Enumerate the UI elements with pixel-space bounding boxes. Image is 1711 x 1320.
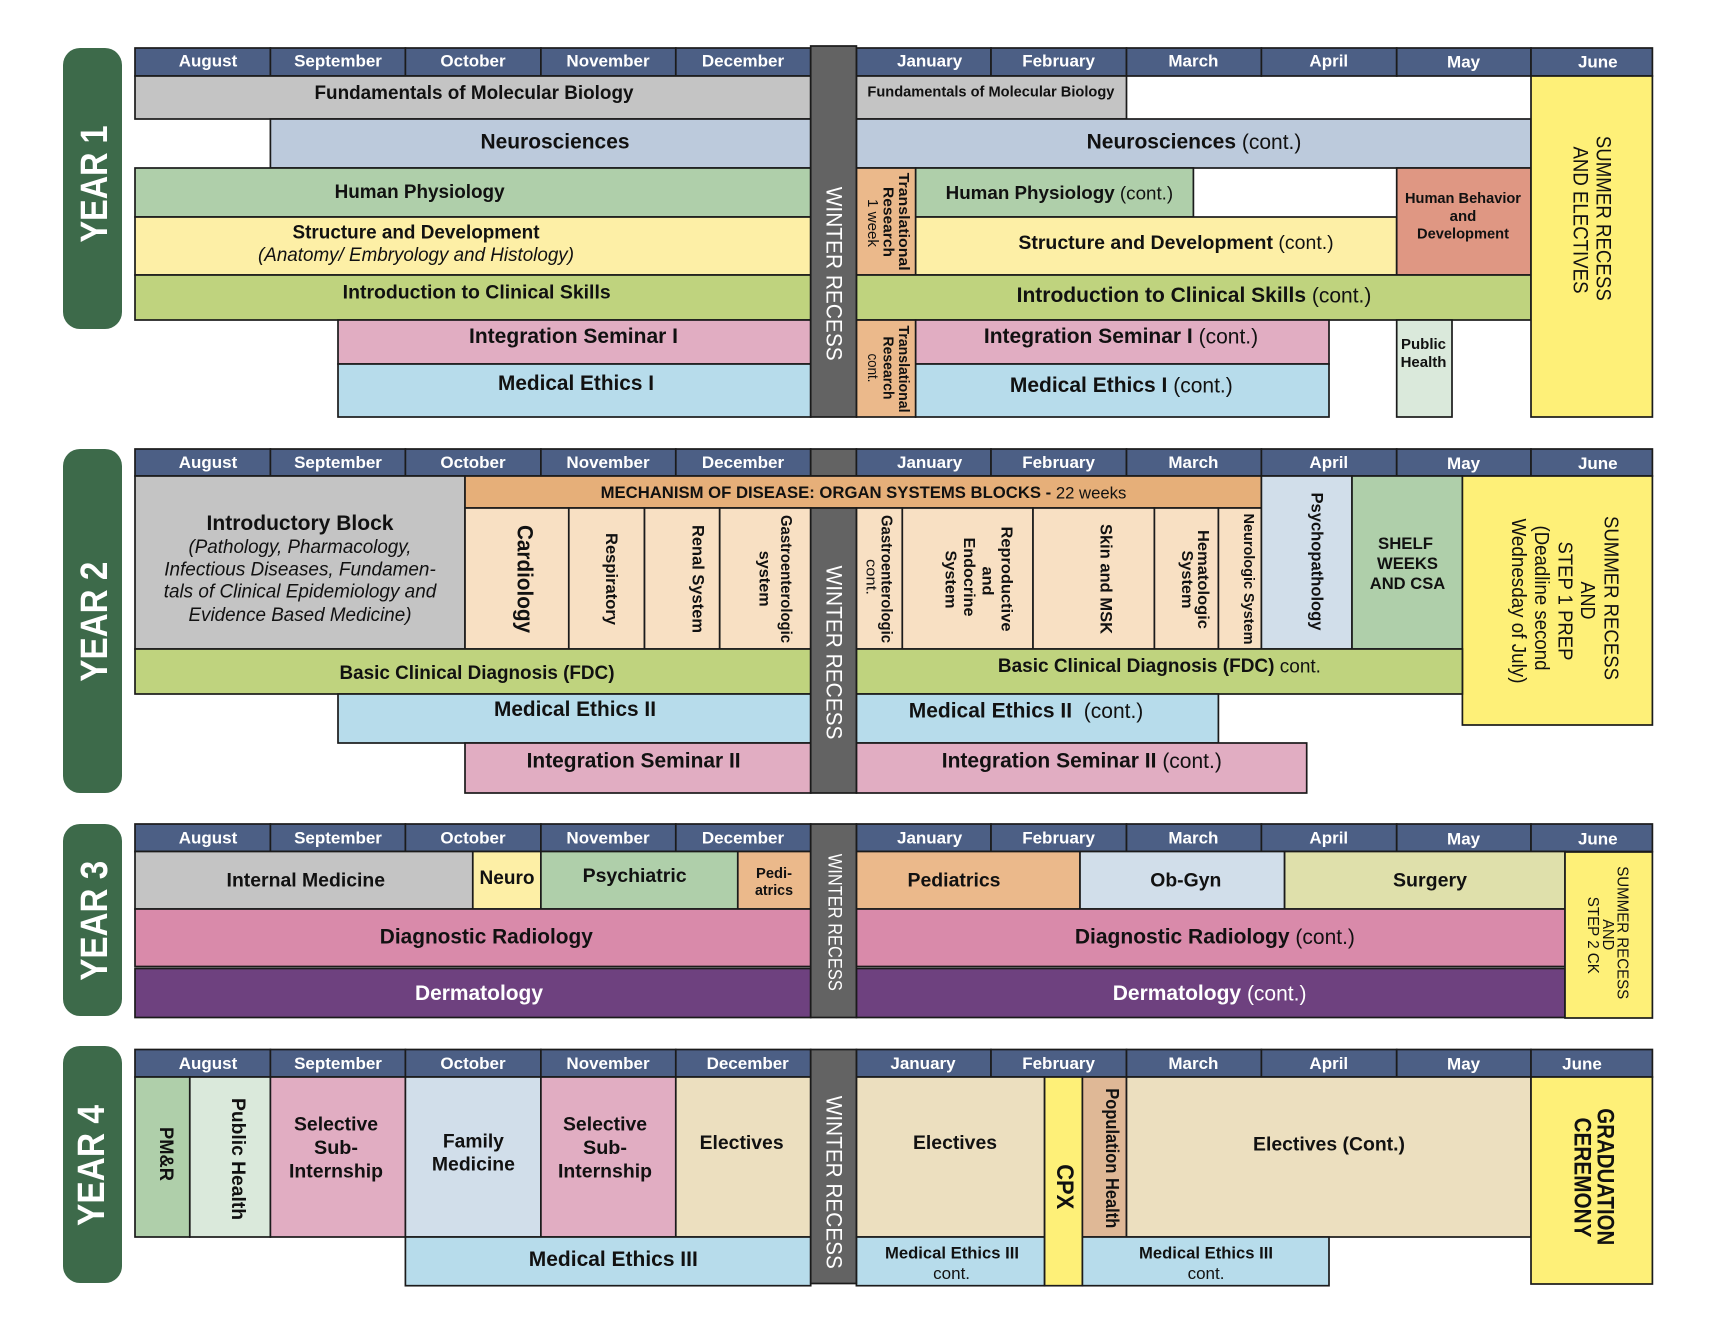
Renal System bbox=[644, 508, 720, 649]
Neurosciences bbox=[270, 119, 811, 168]
Introductory Block: Evidence Based Medicine) bbox=[188, 605, 412, 626]
Shelf weeks and CSA: WEEKS bbox=[1377, 554, 1438, 573]
Shelf weeks and CSA bbox=[1352, 476, 1462, 649]
winter recess bar: WINTER RECESS bbox=[821, 1096, 846, 1269]
year 4 label bbox=[63, 1046, 122, 1283]
month header row: April bbox=[1309, 1054, 1348, 1073]
month header row: December bbox=[702, 52, 784, 70]
month header row: January bbox=[897, 52, 963, 70]
month header row: October bbox=[440, 828, 506, 848]
Dermatology bbox=[135, 968, 811, 1018]
Reproductive and Endocrine System: Reproductive bbox=[998, 526, 1014, 632]
Psychiatric bbox=[541, 852, 738, 909]
Electives January: Electives bbox=[913, 1132, 997, 1154]
Mechanism of Disease banner: MECHANISM OF DISEASE: ORGAN SYSTEMS BLOCKS - 22 weeks bbox=[601, 483, 1126, 502]
winter recess bar: WINTER RECESS bbox=[821, 566, 846, 740]
Introduction to Clinical Skills continued bbox=[856, 275, 1531, 320]
Selective Sub-Internship bbox=[541, 1077, 676, 1237]
winter recess bar: WINTER RECESS bbox=[821, 187, 846, 361]
Introduction to Clinical Skills continued: Introduction to Clinical Skills (cont.) bbox=[1017, 284, 1371, 307]
Neuro bbox=[473, 852, 541, 909]
month header row: April bbox=[1309, 453, 1348, 472]
Neurosciences continued bbox=[856, 119, 1531, 168]
Gastroenterologic continued: cont. bbox=[862, 559, 879, 595]
year 1 label bbox=[63, 48, 122, 329]
month header row: December bbox=[702, 828, 784, 848]
Introductory Block bbox=[135, 476, 465, 649]
Human Physiology continued: Human Physiology (cont.) bbox=[946, 182, 1173, 203]
Medical Ethics I continued bbox=[916, 364, 1329, 417]
Gastroenterologic continued bbox=[856, 508, 902, 649]
Pediatrics: Pediatrics bbox=[908, 869, 1001, 891]
Cardiology: Cardiology bbox=[512, 525, 538, 634]
Introduction to Clinical Skills bbox=[135, 275, 811, 320]
Diagnostic Radiology: Diagnostic Radiology bbox=[380, 926, 593, 948]
month header row: November bbox=[566, 1054, 650, 1073]
Psychopathology: Psychopathology bbox=[1308, 492, 1326, 631]
Selective Sub-Internship bbox=[270, 1077, 405, 1237]
Structure and Development: Structure and Development bbox=[292, 223, 540, 244]
Translational Research 1 week: Translational bbox=[895, 173, 912, 271]
Structure and Development continued bbox=[916, 217, 1397, 275]
month header row: November bbox=[566, 453, 650, 472]
Electives bbox=[676, 1077, 811, 1237]
Surgery: Surgery bbox=[1393, 869, 1467, 891]
Translational Research 1 week: 1 week bbox=[864, 199, 881, 248]
Summer recess and Step 1 prep: SUMMER RECESS bbox=[1600, 516, 1622, 680]
winter recess bar: WINTER RECESS bbox=[823, 854, 844, 991]
Medical Ethics III continued bbox=[1082, 1237, 1329, 1286]
Gastroenterologic system: Gastroenterologic bbox=[777, 515, 794, 643]
Introduction to Clinical Skills: Introduction to Clinical Skills bbox=[343, 282, 611, 303]
Medical Ethics III continued: Medical Ethics III bbox=[885, 1244, 1019, 1262]
Psychiatric: Psychiatric bbox=[583, 865, 687, 887]
Medical Ethics I continued: Medical Ethics I (cont.) bbox=[1010, 374, 1233, 397]
Integration Seminar I continued bbox=[916, 320, 1329, 364]
Surgery bbox=[1285, 852, 1565, 909]
Summer recess and electives: AND ELECTIVES bbox=[1568, 146, 1591, 294]
month header row: March bbox=[1168, 828, 1218, 848]
Summer recess and Step 1 prep: Wednesday of July) bbox=[1507, 518, 1529, 684]
Medical Ethics II bbox=[338, 694, 811, 743]
Neurologic System bbox=[1218, 508, 1261, 649]
Gastroenterologic system bbox=[720, 508, 811, 649]
Gastroenterologic system: system bbox=[756, 551, 772, 607]
year 1 label: YEAR 1 bbox=[74, 126, 116, 242]
month header row: February bbox=[1022, 1054, 1096, 1073]
Ob-Gyn: Ob-Gyn bbox=[1150, 869, 1221, 891]
PM&R: PM&R bbox=[155, 1127, 176, 1181]
Electives continued bbox=[1126, 1077, 1531, 1237]
Medical Ethics III continued bbox=[856, 1237, 1045, 1286]
Ob-Gyn bbox=[1080, 852, 1285, 909]
Introductory Block: Introductory Block bbox=[206, 511, 394, 535]
Basic Clinical Diagnosis continued bbox=[856, 649, 1462, 694]
Translational Research continued: Translational bbox=[895, 326, 912, 412]
Translational Research continued: cont. bbox=[864, 354, 881, 382]
Gastroenterologic continued: Gastroenterologic bbox=[878, 515, 894, 643]
Respiratory bbox=[569, 508, 644, 649]
Shelf weeks and CSA: SHELF bbox=[1378, 534, 1433, 553]
panel: year 4 bbox=[63, 1046, 1652, 1286]
year 3 label bbox=[63, 824, 122, 1016]
Graduation ceremony: GRADUATION bbox=[1591, 1108, 1618, 1245]
Pediatrics bbox=[856, 852, 1080, 909]
Fundamentals of Molecular Biology continued: Fundamentals of Molecular Biology bbox=[867, 83, 1115, 100]
Shelf weeks and CSA: AND CSA bbox=[1370, 574, 1445, 593]
month header row: May bbox=[1447, 830, 1481, 848]
month header row: February bbox=[1022, 52, 1096, 70]
Translational Research 1 week bbox=[856, 168, 916, 275]
month header row: December bbox=[702, 453, 784, 472]
Selective Sub-Internship: Selective bbox=[563, 1114, 647, 1136]
winter recess bar bbox=[811, 1050, 856, 1284]
Respiratory: Respiratory bbox=[602, 533, 621, 626]
Reproductive and Endocrine System: System bbox=[942, 550, 958, 608]
Reproductive and Endocrine System: Endocrine bbox=[960, 538, 977, 617]
month header row: January bbox=[897, 453, 963, 472]
Neurosciences: Neurosciences bbox=[480, 130, 630, 154]
Selective Sub-Internship: Internship bbox=[558, 1160, 652, 1182]
Integration Seminar II continued bbox=[856, 743, 1307, 793]
month header row: March bbox=[1168, 1054, 1218, 1073]
Selective Sub-Internship: Selective bbox=[294, 1114, 378, 1136]
Hematologic System: Hematologic bbox=[1194, 530, 1211, 629]
Neurosciences continued: Neurosciences (cont.) bbox=[1087, 130, 1301, 154]
month header row: September bbox=[294, 828, 382, 848]
month header row: January bbox=[890, 1054, 956, 1073]
Family Medicine: Medicine bbox=[432, 1154, 515, 1176]
Human Behavior and Development: Development bbox=[1417, 226, 1509, 242]
Summer recess and Step 2 CK: SUMMER RECESS bbox=[1614, 866, 1630, 999]
Integration Seminar I bbox=[338, 320, 811, 364]
Fundamentals of Molecular Biology continued bbox=[856, 76, 1126, 119]
Public Health: Public bbox=[1401, 336, 1446, 353]
Internal Medicine: Internal Medicine bbox=[227, 869, 385, 891]
Selective Sub-Internship: Sub- bbox=[583, 1137, 627, 1159]
month header row: May bbox=[1447, 1054, 1481, 1074]
Fundamentals of Molecular Biology bbox=[135, 76, 811, 119]
Renal System: Renal System bbox=[688, 525, 707, 633]
Introductory Block: (Pathology, Pharmacology, bbox=[188, 537, 412, 558]
Skin and MSK: Skin and MSK bbox=[1096, 524, 1116, 635]
month header row bbox=[135, 48, 1652, 76]
Integration Seminar II: Integration Seminar II bbox=[527, 749, 741, 772]
Diagnostic Radiology continued: Diagnostic Radiology (cont.) bbox=[1075, 926, 1355, 948]
Electives continued: Electives (Cont.) bbox=[1253, 1134, 1405, 1156]
Structure and Development continued: Structure and Development (cont.) bbox=[1018, 232, 1334, 254]
Integration Seminar II continued: Integration Seminar II (cont.) bbox=[942, 749, 1222, 772]
Translational Research continued bbox=[856, 320, 916, 417]
Medical Ethics I bbox=[338, 364, 811, 417]
Human Physiology bbox=[135, 168, 811, 217]
Public Health bbox=[190, 1077, 270, 1237]
Public Health bbox=[1397, 320, 1452, 417]
Introductory Block: tals of Clinical Epidemiology and bbox=[164, 582, 438, 603]
year 3 label: YEAR 3 bbox=[74, 861, 116, 981]
Population Health bbox=[1082, 1077, 1126, 1237]
winter recess bar bbox=[811, 824, 856, 1018]
Psychopathology bbox=[1261, 476, 1352, 649]
Summer recess and electives: SUMMER RECESS bbox=[1592, 136, 1614, 301]
Neurologic System: Neurologic System bbox=[1240, 514, 1257, 644]
month header row: October bbox=[440, 453, 506, 472]
month header row: May bbox=[1447, 454, 1481, 473]
month header row: February bbox=[1022, 828, 1096, 848]
Dermatology continued: Dermatology (cont.) bbox=[1113, 982, 1306, 1005]
Human Behavior and Development bbox=[1397, 168, 1531, 275]
month header row: March bbox=[1168, 453, 1218, 472]
year 4 label: YEAR 4 bbox=[71, 1105, 113, 1226]
Basic Clinical Diagnosis: Basic Clinical Diagnosis (FDC) bbox=[340, 663, 614, 684]
panel: year 2 bbox=[63, 449, 1652, 793]
Skin and MSK bbox=[1033, 508, 1154, 649]
Graduation ceremony bbox=[1531, 1077, 1652, 1284]
Integration Seminar II bbox=[465, 743, 811, 793]
panel: year 1 bbox=[63, 46, 1652, 417]
Medical Ethics III bbox=[405, 1237, 811, 1286]
CPX bbox=[1045, 1077, 1082, 1286]
month header row: December bbox=[707, 1054, 789, 1073]
panel: year 3 bbox=[63, 824, 1652, 1018]
month header row: August bbox=[179, 52, 238, 70]
Internal Medicine bbox=[135, 852, 473, 909]
Dermatology continued bbox=[856, 968, 1565, 1018]
winter recess bar bbox=[811, 508, 856, 793]
month header row: June bbox=[1578, 830, 1618, 848]
year 2 label bbox=[63, 449, 122, 793]
Summer recess and Step 1 prep: (Deadline second bbox=[1530, 526, 1552, 670]
month header row: October bbox=[440, 1054, 506, 1073]
month header row: August bbox=[179, 453, 238, 472]
Selective Sub-Internship: Internship bbox=[289, 1160, 383, 1182]
Basic Clinical Diagnosis continued: Basic Clinical Diagnosis (FDC) cont. bbox=[998, 656, 1321, 677]
Human Physiology continued bbox=[916, 168, 1193, 217]
Electives January bbox=[856, 1077, 1045, 1237]
month header row: September bbox=[294, 1054, 382, 1073]
Hematologic System: System bbox=[1178, 550, 1195, 608]
month header row: June bbox=[1578, 52, 1618, 72]
Selective Sub-Internship: Sub- bbox=[314, 1137, 358, 1159]
Translational Research 1 week: Research bbox=[880, 187, 896, 257]
Structure and Development bbox=[135, 217, 811, 275]
month header row bbox=[135, 449, 1652, 476]
Medical Ethics I: Medical Ethics I bbox=[498, 372, 654, 395]
Medical Ethics II continued: Medical Ethics II (cont.) bbox=[909, 700, 1143, 722]
Summer recess and Step 1 prep: STEP 1 PREP bbox=[1554, 542, 1576, 660]
Summer recess and Step 2 CK: STEP 2 CK bbox=[1584, 897, 1601, 974]
Human Behavior and Development: and bbox=[1450, 208, 1476, 225]
Introductory Block: Infectious Diseases, Fundamen- bbox=[164, 559, 436, 580]
month header row: April bbox=[1309, 52, 1348, 70]
Pediatrics short: Pedi- bbox=[756, 865, 792, 882]
month header row: March bbox=[1168, 52, 1218, 70]
month header row: November bbox=[566, 52, 650, 70]
Population Health: Population Health bbox=[1102, 1088, 1122, 1228]
Human Physiology: Human Physiology bbox=[335, 182, 505, 203]
Pediatrics short: atrics bbox=[755, 882, 793, 899]
Basic Clinical Diagnosis bbox=[135, 649, 811, 694]
Dermatology: Dermatology bbox=[415, 982, 543, 1005]
Family Medicine: Family bbox=[443, 1131, 504, 1153]
Medical Ethics III continued: Medical Ethics III bbox=[1139, 1244, 1273, 1262]
Diagnostic Radiology bbox=[135, 909, 811, 966]
Fundamentals of Molecular Biology: Fundamentals of Molecular Biology bbox=[314, 83, 634, 104]
Public Health: Health bbox=[1401, 354, 1446, 371]
month header row: August bbox=[179, 828, 238, 848]
Summer recess and electives bbox=[1531, 76, 1652, 417]
PM&R bbox=[135, 1077, 190, 1237]
month header row: August bbox=[179, 1054, 238, 1073]
Medical Ethics II: Medical Ethics II bbox=[494, 698, 656, 721]
month header row: May bbox=[1447, 52, 1481, 72]
Graduation ceremony: CEREMONY bbox=[1568, 1118, 1596, 1238]
month header row: June bbox=[1562, 1054, 1602, 1074]
month header row: September bbox=[294, 52, 382, 70]
month header row: September bbox=[294, 453, 382, 472]
Integration Seminar I: Integration Seminar I bbox=[469, 325, 678, 348]
Hematologic System bbox=[1154, 508, 1218, 649]
Medical Ethics II continued bbox=[856, 694, 1218, 743]
month header row bbox=[135, 824, 1652, 852]
month header row: June bbox=[1578, 454, 1618, 473]
Structure and Development: (Anatomy/ Embryology and Histology) bbox=[258, 245, 574, 266]
Medical Ethics III: Medical Ethics III bbox=[529, 1248, 698, 1271]
Public Health: Public Health bbox=[227, 1098, 248, 1220]
Medical Ethics III continued: cont. bbox=[1188, 1264, 1224, 1283]
month header row: October bbox=[440, 52, 506, 70]
Translational Research continued: Research bbox=[880, 336, 896, 400]
month header row bbox=[135, 1050, 1652, 1077]
Medical Ethics III continued: cont. bbox=[933, 1264, 970, 1283]
Summer recess and Step 2 CK: AND bbox=[1599, 919, 1616, 950]
Neuro: Neuro bbox=[480, 868, 534, 889]
Summer recess and Step 2 CK bbox=[1565, 852, 1652, 1018]
month header row: April bbox=[1309, 828, 1348, 848]
year 2 label: YEAR 2 bbox=[74, 562, 116, 682]
Mechanism of Disease banner bbox=[465, 476, 1261, 508]
Cardiology bbox=[465, 508, 569, 649]
month header row: November bbox=[566, 828, 650, 848]
Electives: Electives bbox=[700, 1132, 784, 1154]
Family Medicine bbox=[405, 1077, 541, 1237]
Integration Seminar I continued: Integration Seminar I (cont.) bbox=[984, 325, 1258, 348]
Human Behavior and Development: Human Behavior bbox=[1405, 190, 1521, 207]
month header row: February bbox=[1022, 453, 1096, 472]
Reproductive and Endocrine System: and bbox=[978, 566, 996, 596]
Reproductive and Endocrine System bbox=[902, 508, 1033, 649]
month header row: January bbox=[897, 828, 963, 848]
Summer recess and Step 1 prep bbox=[1462, 476, 1652, 725]
CPX: CPX bbox=[1051, 1164, 1078, 1209]
Diagnostic Radiology continued bbox=[856, 909, 1565, 966]
Summer recess and Step 1 prep: AND bbox=[1576, 582, 1598, 620]
Pediatrics short bbox=[738, 852, 811, 909]
winter recess bar bbox=[811, 46, 856, 417]
